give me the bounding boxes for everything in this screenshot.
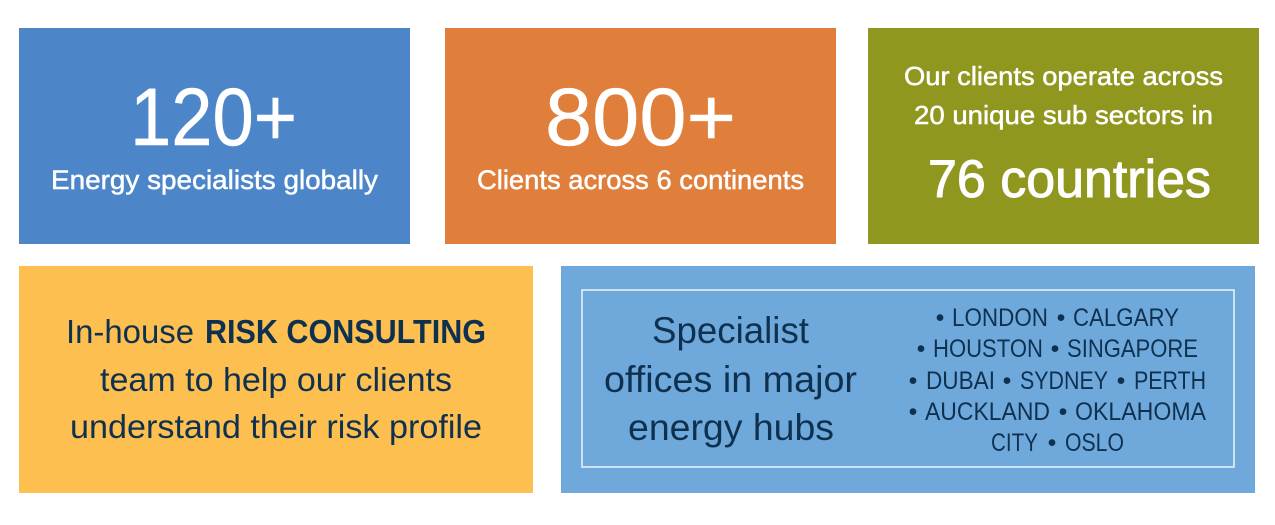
text: risk consulting description: RISK CONSULTING: [205, 313, 486, 350]
list: office cities: •: [1003, 367, 1011, 395]
text: risk consulting description: In-house: [66, 313, 194, 350]
list: office cities: •: [1117, 367, 1125, 395]
list: office cities: HOUSTON: [933, 335, 1043, 363]
list: office cities: •: [909, 367, 917, 395]
text: risk consulting description: understand their risk profile: [70, 408, 482, 445]
panel: clients: [445, 28, 836, 244]
list: office cities: OKLAHOMA: [1075, 398, 1206, 426]
list: office cities: •: [917, 335, 925, 363]
list: office cities: SINGAPORE: [1067, 335, 1198, 363]
list: office cities: •: [909, 398, 917, 426]
list: office cities: •: [1051, 335, 1059, 363]
list: office cities: OSLO: [1065, 429, 1124, 457]
text: risk consulting description: team to help our clients: [100, 361, 452, 398]
list: office cities: PERTH: [1134, 367, 1206, 395]
list: office cities: •: [1059, 398, 1067, 426]
panel: energy specialists: [19, 28, 410, 244]
list: office cities: CITY: [991, 429, 1038, 457]
list: office cities: CALGARY: [1073, 304, 1179, 332]
panel: countries: [868, 28, 1259, 244]
heading: specialist offices: [604, 310, 857, 448]
stat: 76 countries: 76 countries: [928, 150, 1211, 209]
list: office cities: •: [1057, 304, 1065, 332]
list: office cities: LONDON: [952, 304, 1048, 332]
text: sub sectors intro: 20 unique sub sectors in: [914, 100, 1213, 130]
list: office cities: •: [1048, 429, 1056, 457]
list: office cities: •: [936, 304, 944, 332]
list: office cities: DUBAI: [926, 367, 995, 395]
heading: specialist offices: Specialist: [652, 310, 810, 351]
inner border: [582, 290, 1234, 467]
text: risk consulting description: [66, 313, 486, 445]
list: office cities: AUCKLAND: [925, 398, 1050, 426]
text: sub sectors intro: [904, 61, 1223, 130]
list: office cities: [909, 304, 1206, 457]
heading: specialist offices: offices in major: [604, 359, 857, 400]
list: office cities: SYDNEY: [1020, 367, 1108, 395]
panel: specialist offices: [561, 266, 1255, 493]
stat: 800+: 800+: [545, 72, 736, 163]
panel: risk consulting: [19, 266, 533, 493]
caption: energy specialists globally: Energy specialists globally: [51, 165, 379, 195]
heading: specialist offices: energy hubs: [628, 407, 834, 448]
text: sub sectors intro: Our clients operate across: [904, 61, 1223, 91]
caption: clients across 6 continents: Clients across 6 continents: [477, 165, 804, 195]
stat: 120+: 120+: [130, 72, 297, 163]
